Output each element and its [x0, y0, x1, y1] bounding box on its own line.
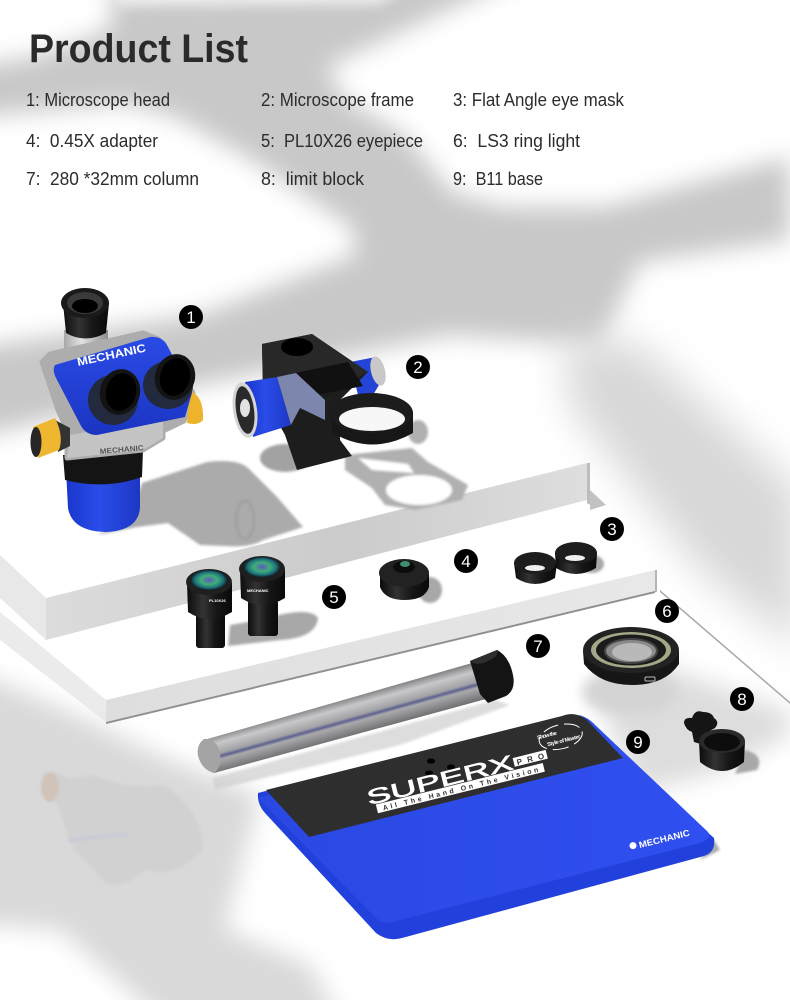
eyepiece A: PL10X26: [209, 598, 226, 603]
list entry 2: 2: Microscope frame: [261, 90, 414, 110]
badge 6: [655, 599, 679, 623]
blue cover: [54, 337, 192, 435]
silver body: [42, 333, 193, 458]
badge 4: 4: [461, 552, 471, 571]
plate shadow: [700, 840, 720, 860]
list entry 3: 3: Flat Angle eye mask: [453, 90, 625, 110]
MECHANIC logo: MECHANIC: [76, 343, 147, 369]
blue tube front: [245, 377, 291, 437]
SUPERX PRO logo: All The Hand On The Vision: [382, 767, 539, 812]
list entry 6: 6: LS3 ring light: [453, 131, 580, 151]
plate top surface: [258, 715, 709, 922]
item 6: LS3 ring light: [582, 627, 679, 716]
ring: [699, 741, 745, 771]
badge 6: 6: [662, 602, 672, 621]
right yellow knob: [187, 391, 203, 424]
panel: upper step: [0, 463, 606, 640]
end cap with logo: [229, 381, 261, 439]
item 9: B11 base plate: [258, 714, 720, 939]
plate blue body: [258, 714, 714, 939]
title: Product List: [29, 27, 248, 71]
badge 2: [406, 355, 430, 379]
top tube: [61, 288, 109, 352]
eye tube left: [88, 365, 145, 425]
badge 2: 2: [413, 358, 423, 377]
left yellow knob: [30, 418, 70, 458]
item 4: 0.45X adapter: [379, 559, 442, 603]
ring holder: [330, 412, 413, 444]
black panel: [266, 714, 623, 837]
SUPERX PRO logo: PRO: [516, 752, 545, 767]
badge 5: [322, 585, 346, 609]
badge 9: 9: [633, 733, 643, 752]
floor reflections of the microscope head: [41, 772, 203, 885]
badge 9: [626, 730, 650, 754]
eye tube right: [143, 350, 200, 409]
lower barrel: [63, 450, 143, 532]
badge 5: 5: [329, 588, 339, 607]
badge 7: [526, 634, 550, 658]
badge 7: 7: [533, 637, 543, 656]
black block: [262, 334, 368, 470]
panel: lower step: [0, 570, 790, 724]
badge 4: [454, 549, 478, 573]
list entry 4: 4: 0.45X adapter: [26, 131, 158, 151]
item 5: eyepieces: [186, 556, 318, 648]
shadow of eyepieces: [228, 612, 318, 646]
badge 1: 1: [186, 308, 196, 327]
list entry 9: 9: B11 base: [453, 169, 543, 189]
item 3: flat angle eye masks: [514, 542, 604, 584]
Show the Style of Master badge: Style of Master: [547, 734, 582, 748]
eyepiece B: MECHANIC: [247, 588, 269, 593]
badge 8: 8: [737, 690, 747, 709]
SUPERX PRO logo: SUPERX: [364, 752, 516, 810]
MECHANIC engraved: MECHANIC: [99, 443, 145, 456]
Show the Style of Master badge: [536, 720, 585, 754]
badge 3: 3: [607, 520, 617, 539]
item 2: microscope frame: [229, 334, 413, 470]
right blue tube: [350, 357, 385, 400]
MECHANIC logo on plate: MECHANIC: [638, 828, 691, 850]
MECHANIC logo on plate: [629, 828, 691, 852]
badge 1: [179, 305, 203, 329]
list entry 1: 1: Microscope head: [26, 90, 170, 110]
badge 8: [730, 687, 754, 711]
item list: [26, 90, 625, 189]
SUPERX PRO logo: [364, 743, 551, 815]
star knob: [684, 711, 717, 745]
item 1: microscope head: [30, 288, 203, 532]
item 7: column: [198, 650, 514, 790]
badge 3: [600, 517, 624, 541]
item 8: limit block: [684, 711, 759, 774]
list entry 8: 8: limit block: [261, 169, 365, 189]
mount holes: [425, 758, 455, 776]
shadow of the microscope head: [97, 461, 303, 546]
Show the Style of Master badge: Show the: [537, 731, 558, 741]
shadow of the microscope frame: [260, 420, 468, 510]
list entry 5: 5: PL10X26 eyepiece: [261, 131, 423, 151]
badges: item numbers: [179, 305, 754, 754]
list entry 7: 7: 280 *32mm column: [26, 169, 199, 189]
